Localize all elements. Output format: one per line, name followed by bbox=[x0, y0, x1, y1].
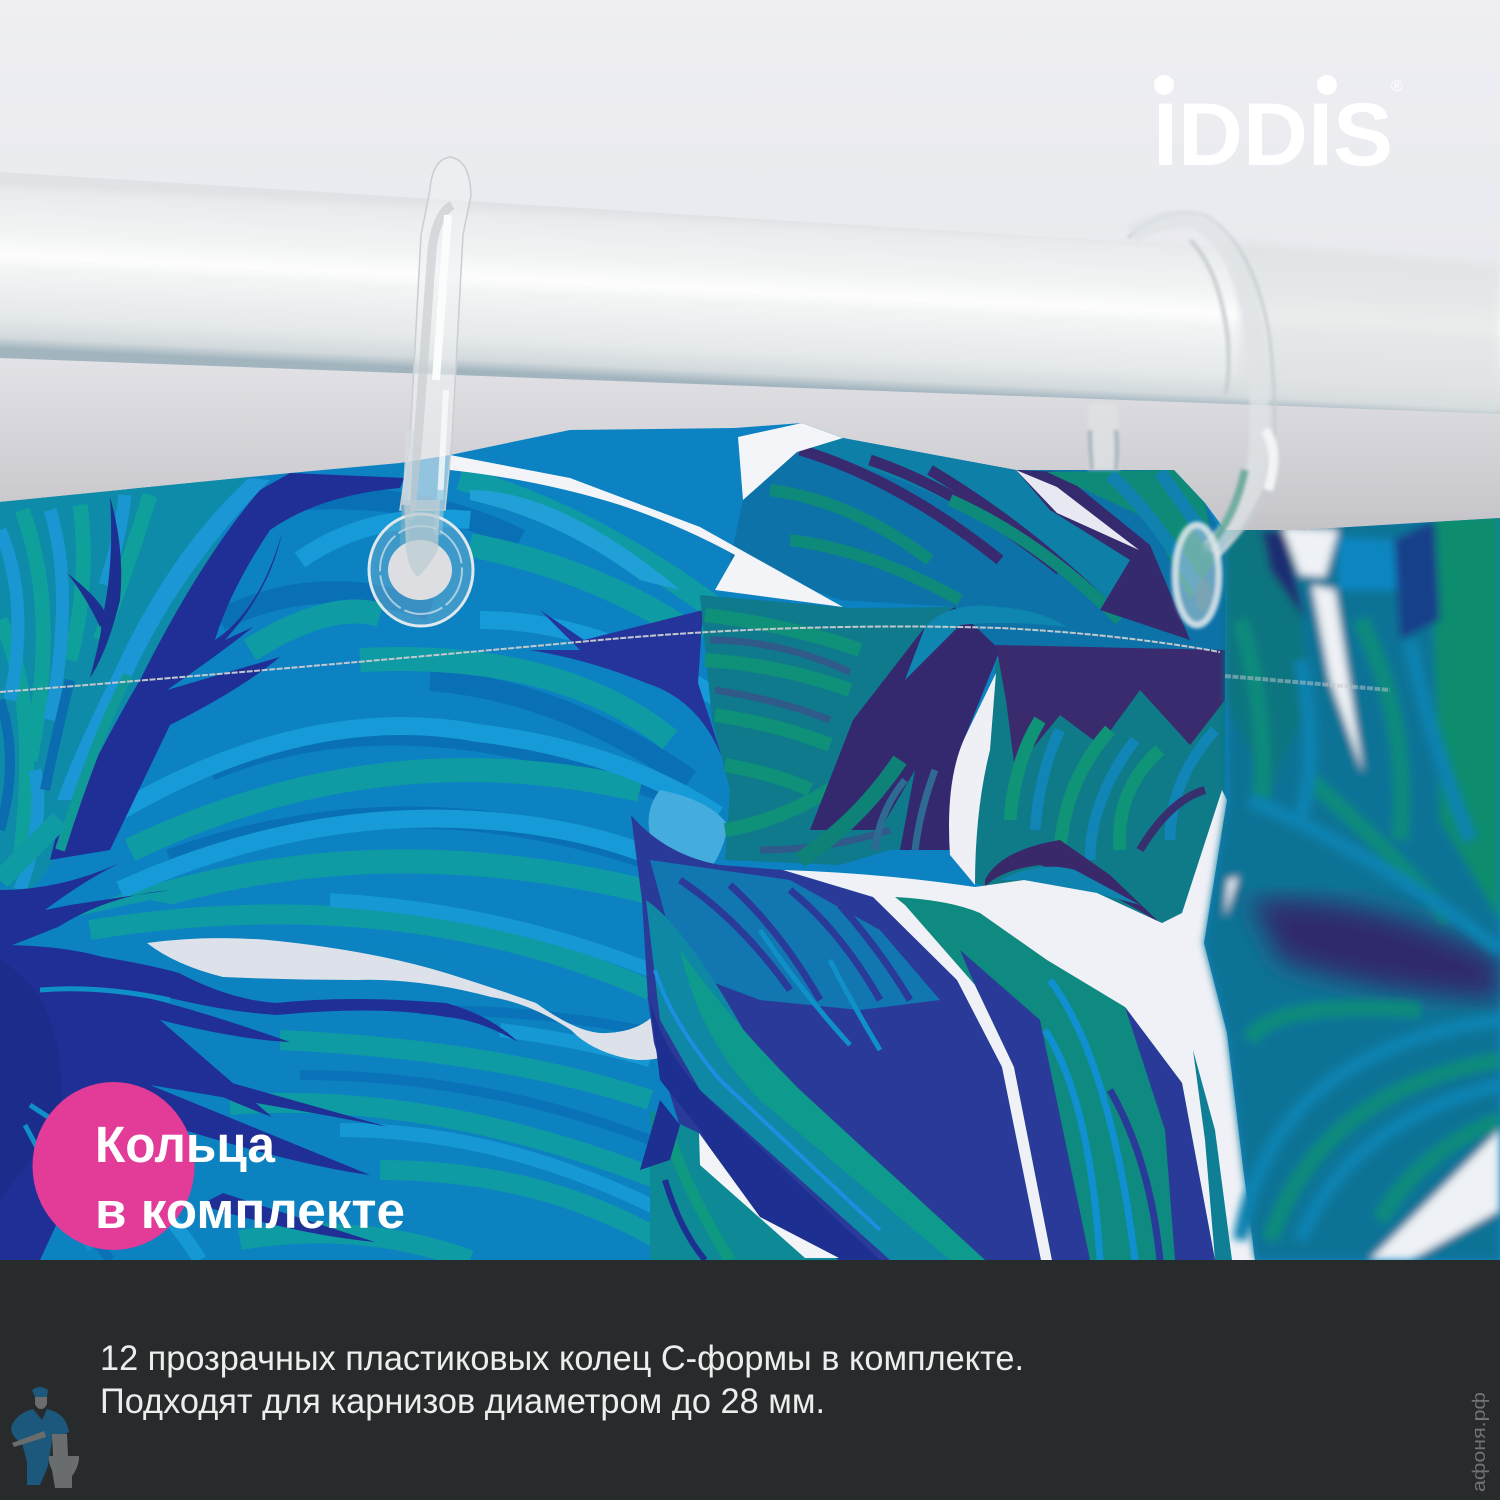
icon: plumber with toilet bbox=[11, 1387, 79, 1488]
description text: Подходят для карнизов диаметром до 28 мм. bbox=[100, 1382, 825, 1421]
white vein: top bbox=[450, 455, 843, 607]
transparent ring: left bbox=[369, 157, 473, 626]
pink circle bbox=[32, 1082, 194, 1250]
leaf: blue upper right of centre bbox=[730, 438, 1225, 650]
shower curtain with leaf print bbox=[0, 420, 1500, 1260]
curtain stitched seam bbox=[0, 626, 1390, 692]
logo: iDDiS: IDDIS bbox=[1153, 84, 1393, 184]
leaf: central left dark blue with stripes bbox=[631, 815, 1041, 1260]
leaf: bright band by seam bbox=[905, 606, 1067, 680]
white leaf area bbox=[783, 790, 1255, 1260]
white vein: lower bbox=[699, 1133, 839, 1258]
white vein: left bbox=[147, 938, 660, 1060]
logo: iDDiS: ® bbox=[1391, 78, 1403, 95]
leaf: top left teal stripes bbox=[0, 475, 250, 920]
curtain rod bbox=[0, 172, 1500, 414]
leaf: big bright blue, upper part bbox=[60, 478, 730, 930]
heading: Кольца bbox=[95, 1116, 276, 1173]
ring in the background bbox=[1088, 402, 1120, 470]
white triangle at top bbox=[738, 423, 843, 500]
watermark: афоня.рф bbox=[1469, 1392, 1489, 1492]
leaf: central bright blue stem and dark midrib bbox=[50, 473, 404, 860]
leaf: right of centre purple bbox=[970, 645, 1225, 923]
leaf: bottom left bbox=[0, 820, 660, 1260]
leaf: middle green stripes bbox=[700, 595, 1000, 865]
grommet bbox=[369, 514, 473, 626]
leaves: right, out of focus bbox=[1204, 515, 1500, 1260]
leaf: right of white vein bbox=[895, 897, 1232, 1260]
callout: pink circle with heading bbox=[32, 1082, 405, 1250]
grommet bbox=[1175, 525, 1219, 625]
leaf: lower centre teal bbox=[640, 1100, 839, 1260]
white vein: middle bbox=[949, 673, 996, 885]
dark blue band and shade bbox=[0, 945, 518, 1260]
transparent ring: right bbox=[1128, 213, 1275, 625]
leaf: dark patch right of blue leaf bbox=[530, 610, 723, 760]
bottom dark band bbox=[0, 1260, 1500, 1500]
heading: в комплекте bbox=[95, 1182, 405, 1239]
wall below the rod bbox=[0, 350, 1500, 540]
description text: 12 прозрачных пластиковых колец С-формы в комплекте. bbox=[100, 1339, 1024, 1378]
photo background: wall bbox=[0, 0, 1500, 420]
